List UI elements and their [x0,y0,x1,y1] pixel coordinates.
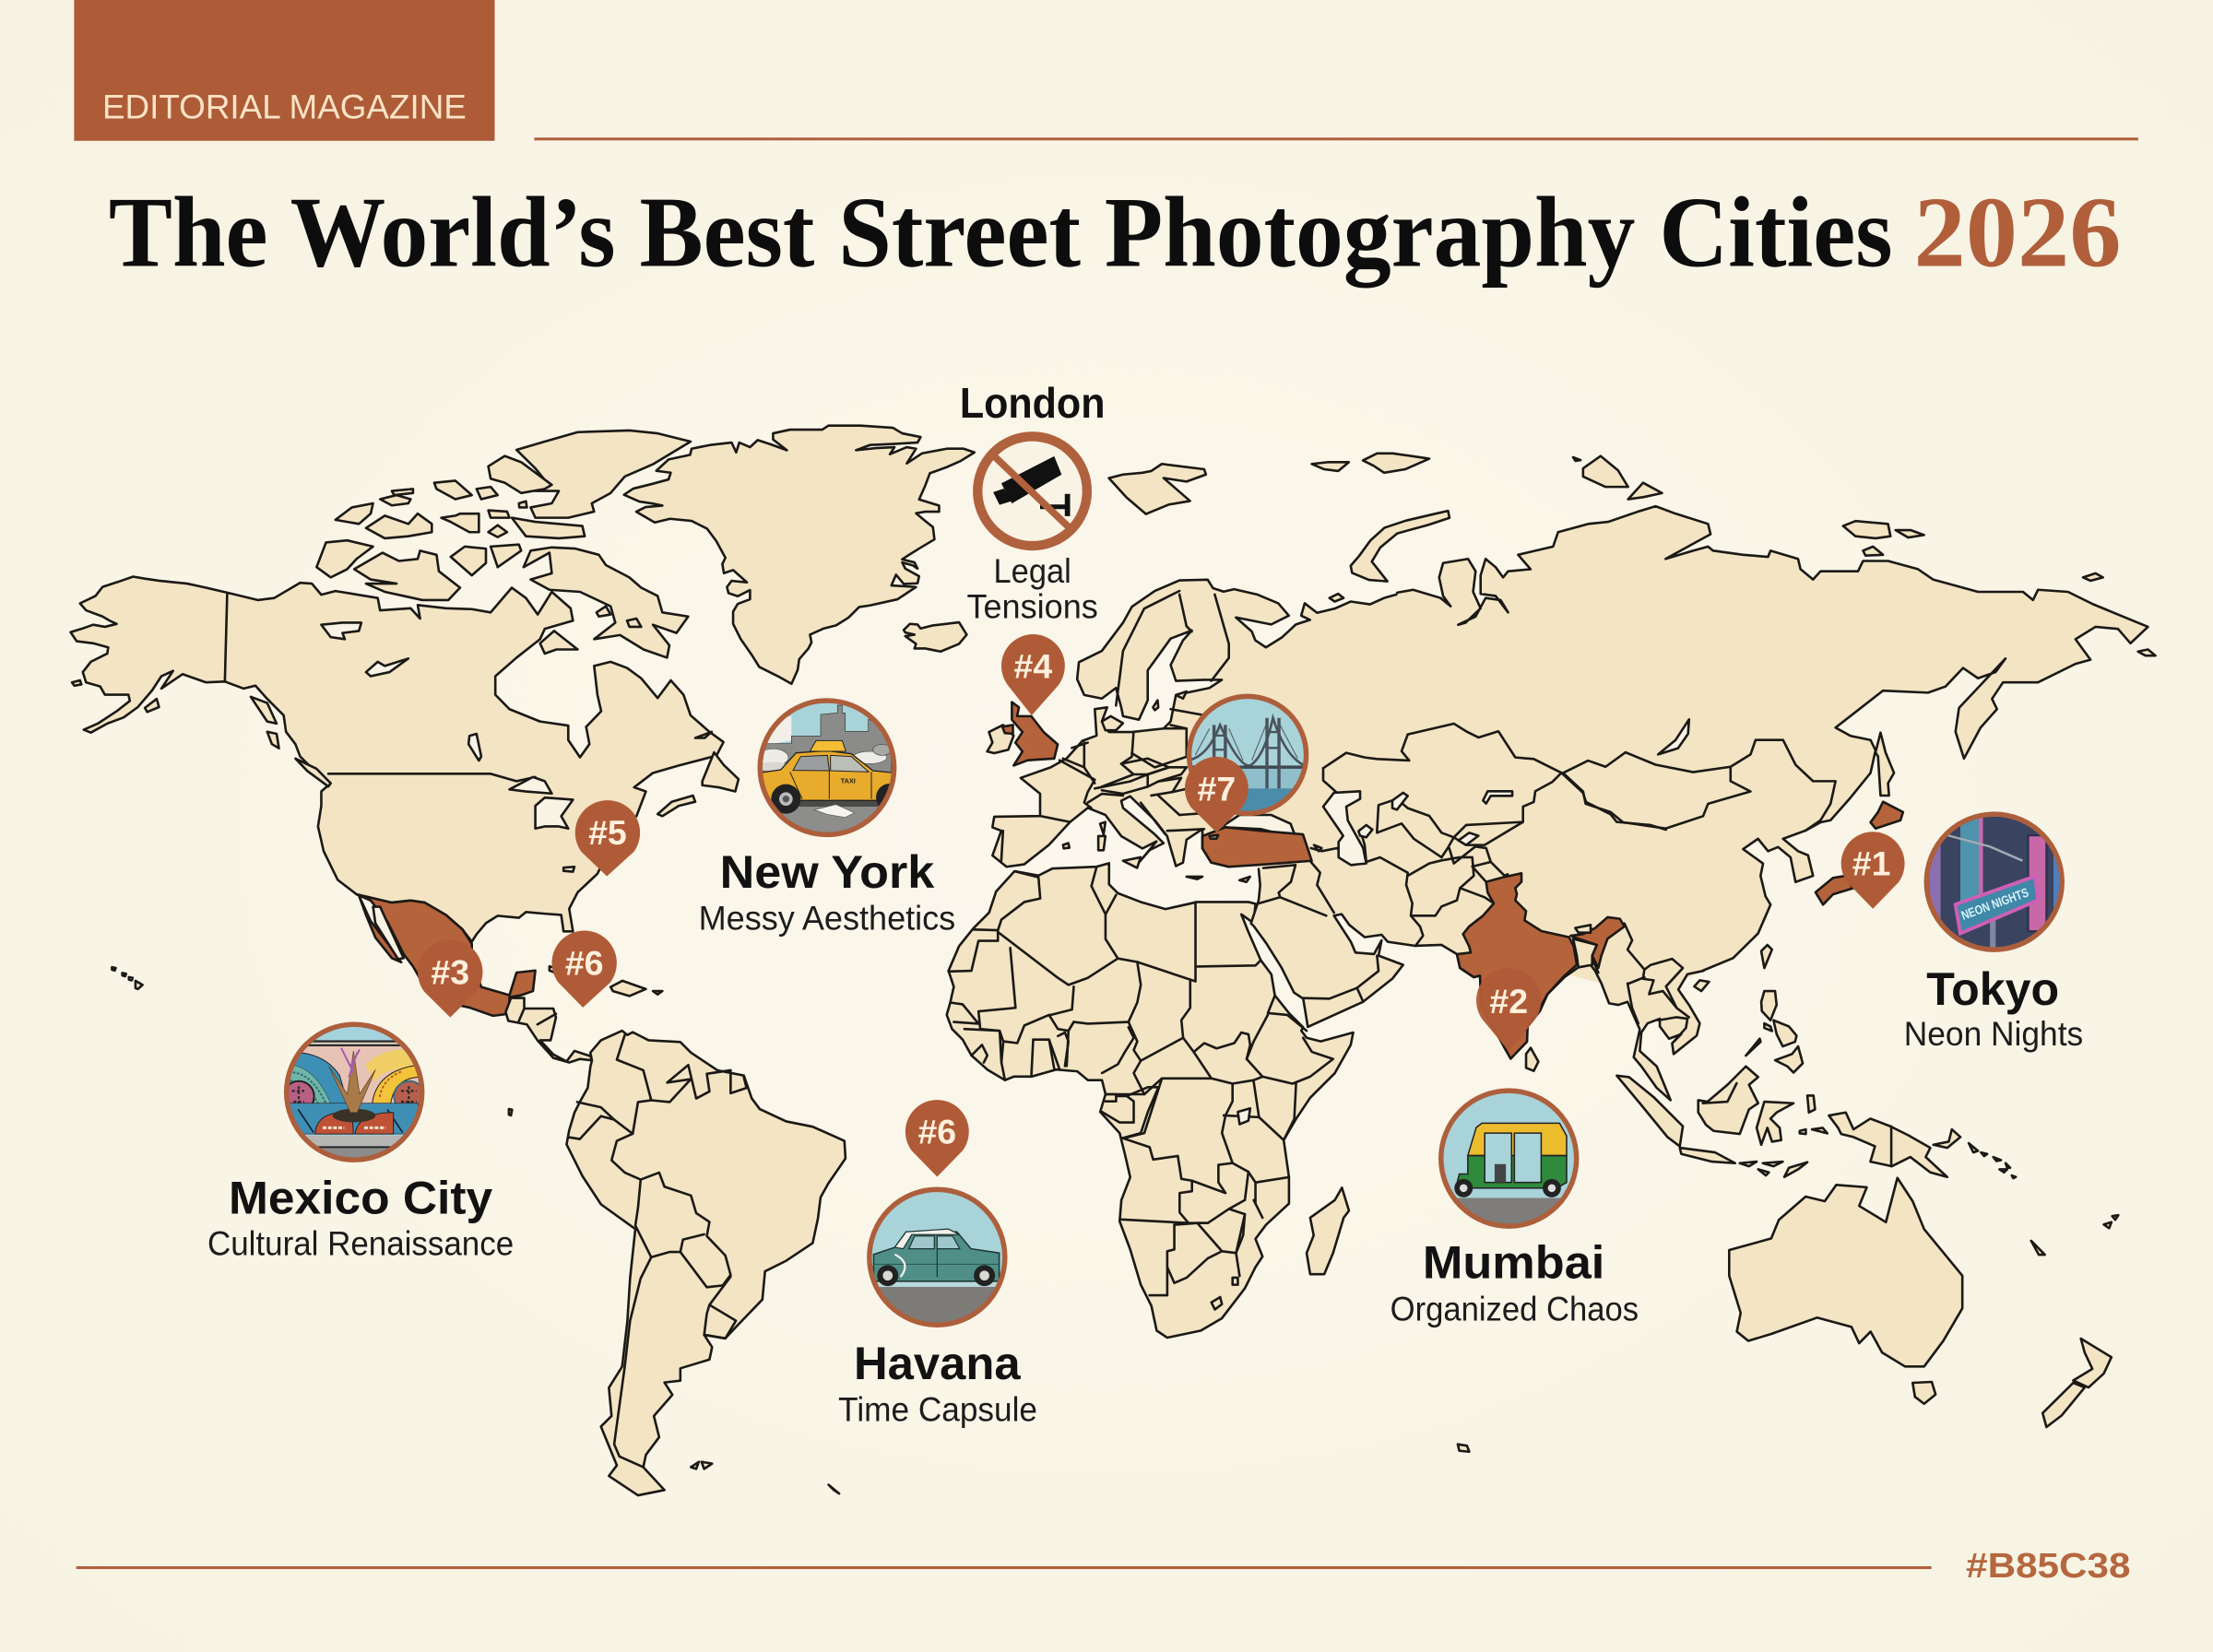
label: havana: Time Capsule [838,1390,1037,1428]
label: legal tensions: Legal [994,552,1071,590]
pin: rank 4 [1001,634,1065,715]
pin: rank 7: #7 [1198,770,1236,808]
greenland and iceland [624,426,975,684]
pin: rank 1: #1 [1852,844,1890,883]
pin: rank 7 [1185,757,1249,832]
label: new york: New York [720,846,935,898]
label: havana: Havana [854,1338,1021,1389]
pin: rank 5: #5 [588,813,627,852]
title: 2026 [1914,177,2122,289]
northern and eastern asia [1397,456,2156,971]
header tag: editorial magazine: EDITORIAL MAGAZINE [102,88,467,126]
label: legal tensions [966,552,1098,625]
header tag: editorial magazine [74,0,494,141]
pin: rank 4: #4 [1014,646,1052,685]
label: new york [699,846,955,938]
pin: rank 6 gulf: #6 [565,944,604,983]
pin: rank 2: #2 [1489,982,1528,1021]
pin: rank 6 havana [905,1100,969,1177]
southeast asia and oceania islands [1591,924,2016,1178]
australia and new zealand [1458,1178,2118,1452]
label: mexico city: Mexico City [229,1172,493,1223]
mexico highlighted [357,894,536,1016]
pin: rank 6 gulf [551,930,617,1008]
label: mumbai: Organized Chaos [1391,1291,1639,1328]
icon: no camera sign [977,436,1087,546]
icon: new york taxi [758,698,896,837]
label: mumbai: Mumbai [1423,1237,1604,1289]
label: mexico city: Cultural Renaissance [207,1224,514,1262]
label: new york: Messy Aesthetics [699,900,955,938]
label: tokyo: Tokyo [1926,963,2059,1015]
north america [71,431,739,996]
pin: rank 3: #3 [431,953,469,992]
pin: rank 5 [575,800,640,877]
pin: rank 3 [418,939,482,1018]
label: havana [838,1338,1037,1428]
south and central asia [1251,724,1666,1071]
label: legal tensions: Tensions [966,587,1098,625]
icon: new york taxi: TAXI [841,776,856,785]
icon: mexico city mural [284,1021,424,1162]
icon: havana classic car [864,1186,1011,1332]
europe [988,454,1429,882]
central and south america [505,998,846,1495]
footer color code: #B85C38 [1966,1546,2130,1586]
label: mexico city [207,1172,514,1262]
icon: tokyo neon signs [1923,811,2065,952]
label: tokyo: Neon Nights [1904,1015,2083,1053]
icon: istanbul bridge [1183,693,1310,820]
label: london: London [960,379,1105,427]
title: The World’s Best Street Photography Cities [109,177,1893,289]
world map [71,426,2156,1495]
label: mumbai [1391,1237,1639,1328]
icon: tokyo neon signs: NEON NIGHTS [1959,886,2030,923]
label: tokyo [1904,963,2083,1053]
africa [947,863,1354,1338]
pin: rank 1 [1841,832,1905,909]
pin: rank 6 havana: #6 [917,1113,956,1151]
icon: mumbai auto rickshaw [1436,1087,1582,1233]
pin: rank 2 [1476,968,1541,1051]
novaya zemlya [1351,511,1450,582]
